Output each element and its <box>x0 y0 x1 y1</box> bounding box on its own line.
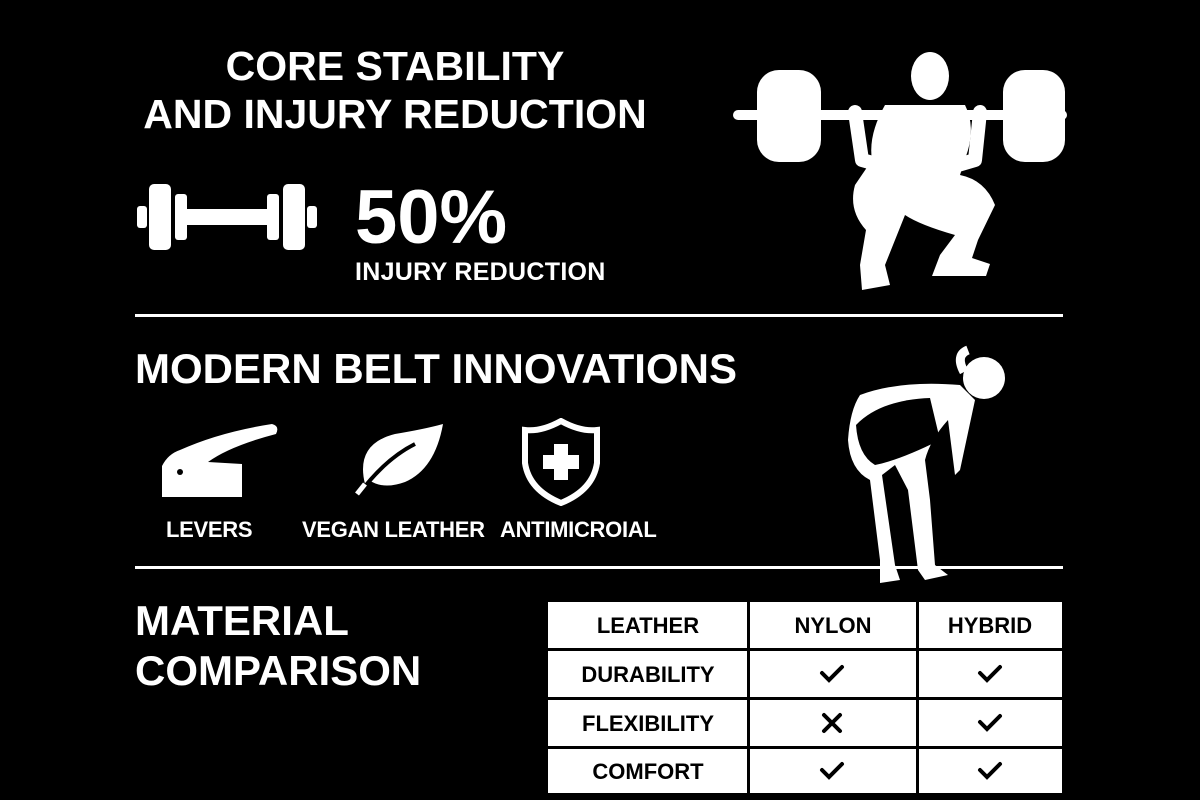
table: material comparison: NYLON <box>794 613 872 638</box>
illustration: squat <box>733 52 1067 290</box>
title: AND INJURY REDUCTION <box>143 91 647 137</box>
text: VEGAN LEATHER <box>302 517 485 542</box>
labels: innovations: LEVERS <box>166 517 252 542</box>
table: material comparison: DURABILITY <box>581 662 715 687</box>
heading: material comparison: MATERIAL <box>135 597 349 644</box>
table: material comparison <box>546 600 1064 794</box>
table: material comparison: COMFORT <box>592 759 704 784</box>
table: material comparison: FLEXIBILITY <box>582 711 714 736</box>
title <box>143 43 647 137</box>
icon: leaf <box>355 424 443 496</box>
table: material comparison: HYBRID <box>948 613 1032 638</box>
illustration: deadlift woman <box>848 346 1005 583</box>
text: ANTIMICROIAL <box>500 517 656 542</box>
icon: shield <box>522 418 600 506</box>
icon: dumbbell <box>137 184 317 250</box>
stat: 50%: 50% <box>355 175 507 260</box>
heading: material comparison: COMPARISON <box>135 647 421 694</box>
title: CORE STABILITY <box>226 43 564 89</box>
table: material comparison: LEATHER <box>597 613 699 638</box>
divider <box>135 566 1063 569</box>
heading: material comparison <box>135 597 421 694</box>
divider <box>135 314 1063 317</box>
heading: modern belt innovations: MODERN BELT INNOVATIONS <box>135 345 737 392</box>
stat label: INJURY REDUCTION <box>355 258 606 286</box>
icon: levers <box>162 424 278 497</box>
